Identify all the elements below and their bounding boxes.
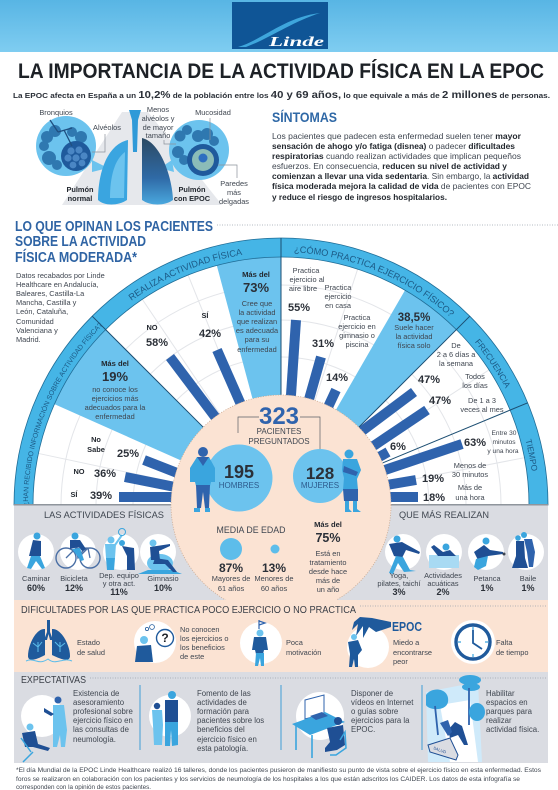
lung labels: Menos [147, 105, 169, 114]
text: asesoramiento: asesoramiento [73, 698, 125, 707]
mujeres [293, 449, 361, 512]
text: formación: Fomento de las [197, 689, 251, 698]
semicircular chart [14, 238, 548, 506]
media de edad [212, 525, 294, 593]
chart grid [38, 269, 524, 725]
chart labels: frecuencia: 47% [418, 374, 440, 386]
bars [119, 320, 462, 497]
data source note: Valenciana y [16, 326, 58, 335]
footnote: *El día Mundial de la EPOC Linde Healthcare realizó 16 talleres, donde los pacientes pusieron de manifiesto su punto de vista sobre el ejercicio físico en esta enfermedad. Estos [16, 767, 541, 774]
mujeres: MUJERES [301, 481, 339, 490]
icon: caminar: Caminar [22, 574, 50, 583]
text: falta de tiempo: de tiempo [496, 648, 528, 657]
trachea [129, 110, 141, 152]
icon: deporte en equipo: 11% [110, 587, 128, 597]
chart labels: cómo practica: aire libre [289, 284, 317, 293]
text: miedo: Miedo a [393, 638, 420, 647]
chart labels: información: 39% [90, 490, 112, 502]
icon: caminar [18, 532, 54, 593]
media de edad: Mayores de [212, 574, 250, 583]
icon: petanca: 1% [480, 583, 494, 593]
chart labels: información: 36% [94, 468, 116, 480]
text: parques: actividad física. [486, 725, 539, 734]
chart labels: realiza: Cree que [242, 299, 272, 308]
chart labels: realiza: es adecuada [236, 326, 279, 335]
chart labels: cómo practica: ejercicio en [338, 322, 376, 331]
lung labels [39, 105, 249, 206]
text: parques [486, 689, 539, 734]
chart labels: frecuencia: 2 a 6 días a [437, 350, 476, 359]
chart labels: información: 25% [117, 448, 139, 460]
chart labels: tiempo: 30 minutos [452, 470, 488, 479]
total: PACIENTES [257, 427, 301, 436]
lung labels: con EPOC [174, 194, 211, 203]
lung labels: Paredes [220, 179, 248, 188]
right lung [142, 138, 173, 204]
chart labels: realiza [146, 270, 279, 354]
icon: yoga: pilates, taichí [377, 579, 422, 588]
síntomas [272, 110, 531, 202]
icon: yoga [377, 534, 422, 597]
icon: question: ? [161, 631, 169, 645]
footnote: foros se realizaron en colaboración con los pacientes y los servicios de neumología de los hospitales a los que están adscritos los CAIDER. Los datos de esta infografía se [16, 776, 521, 783]
síntomas: comienzan a llevar una vida sedentaria. Sin embargo, la actividad [272, 171, 529, 181]
chart labels: tiempo: 19% [422, 473, 444, 485]
chart labels: información: adecuados para la [85, 403, 146, 412]
lung labels: más [227, 188, 241, 197]
chart labels: cómo practica: 38,5% [398, 312, 430, 324]
text: formación: esta patología. [197, 744, 248, 753]
section heading: opinion: LO QUE OPINAN LOS PACIENTES [15, 219, 213, 235]
más del 75%: más de [316, 576, 340, 585]
subtitle: La EPOC afecta en España a un 10,2% de la población entre los 40 y 69 años, lo que equivale a más de 2 millones de personas. [13, 89, 550, 101]
dividers [140, 685, 422, 750]
icon: bicicleta: 12% [65, 583, 83, 593]
chart labels: realiza: 42% [199, 328, 221, 340]
icon: deporte en equipo: Dep. equipo [99, 571, 139, 580]
chart labels: tiempo: minutos [492, 439, 516, 446]
icon: actividades acuáticas: 2% [436, 587, 450, 597]
text: poca motivación [286, 638, 321, 657]
chart labels: cómo practica: 14% [326, 372, 348, 384]
activities heading: LAS ACTIVIDADES FÍSICAS [44, 510, 164, 520]
lung labels: alvéolos y [142, 114, 175, 123]
text: no conocen: los beneficios [180, 643, 225, 652]
más del 75% [309, 520, 347, 594]
sector dividers [92, 238, 528, 463]
lung labels: delgadas [219, 197, 249, 206]
left lung [98, 140, 128, 204]
panel: expectativas [14, 672, 548, 763]
chart labels: realiza: 73% [243, 280, 269, 295]
chart labels: cómo practica: en casa [325, 301, 352, 310]
icon: gimnasio [138, 534, 182, 593]
text: formación: pacientes sobre los [197, 716, 264, 725]
chart labels: cómo practica: la actividad [396, 332, 432, 341]
text: no conocen: No conocen [180, 625, 219, 634]
chart labels: información [71, 359, 146, 502]
text: parques: Habilitar [486, 689, 515, 698]
mujeres: 128 [306, 464, 334, 483]
text: parques: parques para [486, 707, 533, 716]
chart labels: realiza: para su [245, 335, 269, 344]
chart labels: realiza: Más del [242, 270, 270, 279]
lung labels: Pulmón [66, 185, 94, 194]
data source note: Madrid. [16, 335, 41, 344]
text: miedo [393, 638, 432, 666]
chart labels: cómo practica: piscina [345, 340, 369, 349]
chart labels: frecuencia: la semana [439, 359, 474, 368]
síntomas: respiratorias cuando realizan actividades que implican pequeños [272, 151, 521, 161]
más del 75%: desde hace [309, 567, 347, 576]
text: poca motivación: motivación [286, 648, 321, 657]
icon: vídeos [292, 692, 346, 758]
media de edad: 61 años [218, 584, 244, 593]
chart labels: tiempo: Menos de [454, 461, 486, 470]
icon: miedo EPOC [347, 617, 422, 668]
data source note: Baleares, Castilla-La [16, 289, 85, 298]
chart labels: información: Sabe [87, 445, 105, 454]
activities heading [44, 510, 489, 520]
icon: parque: SALUD [433, 745, 447, 755]
icon: question [134, 621, 176, 663]
chart labels: tiempo: Más de [458, 483, 482, 492]
text: vídeos: ejercicios para la [351, 716, 410, 725]
chart labels: cómo practica: 55% [288, 302, 310, 314]
icon: yoga: Yoga, [390, 571, 408, 580]
media de edad: 87% [219, 561, 243, 575]
síntomas: física moderada mejora la calidad de vida de pacientes con EPOC [272, 181, 531, 191]
chart labels: información: ejercicios más [92, 394, 139, 403]
síntomas: y reduce el riesgo de ingresos hospitalarios. [272, 192, 447, 202]
hombres: HOMBRES [219, 481, 259, 490]
text: vídeos: o guías sobre [351, 707, 398, 716]
chart labels: tiempo: una hora [455, 493, 485, 502]
icon: parque [426, 675, 485, 762]
chart labels: tiempo [422, 430, 519, 504]
data source note: León, Cataluña, [16, 307, 68, 316]
lung labels: Pulmón [178, 185, 206, 194]
band label: cómo: ¿CÓMO PRACTICA EJERCICIO FÍSICO? [294, 246, 454, 316]
text: asesoramiento: Existencia de [73, 689, 119, 698]
más del 75%: Más del [314, 520, 342, 529]
chart labels: información: No [91, 435, 101, 444]
media de edad: Menores de [254, 574, 294, 583]
chart labels: cómo practica: Practica [293, 266, 320, 275]
logo: Linde [232, 2, 328, 50]
data source note: Datos recabados por Linde [16, 271, 105, 280]
text: miedo: encontrarse [393, 648, 432, 657]
icon: deporte en equipo [99, 528, 139, 597]
chart labels: realiza: enfermedad [237, 345, 277, 354]
logo: Linde: Linde [267, 35, 324, 50]
text: vídeos [351, 689, 414, 734]
hombres: 195 [224, 462, 254, 482]
lung: normal circle [36, 116, 108, 176]
text: formación: actividades de [197, 698, 247, 707]
band label: información: ¿HAN RECIBIDO INFORMACIÓN SOBRE ACTIVIDAD FÍSICA? [23, 322, 102, 504]
icon: bicicleta [56, 532, 100, 593]
text: falta de tiempo [496, 638, 528, 657]
chart labels: frecuencia: veces al mes [460, 405, 504, 414]
chart labels: frecuencia: De 1 a 3 [468, 396, 496, 405]
text: formación: formación para [197, 707, 250, 716]
media de edad: 13% [262, 561, 286, 575]
text: asesoramiento [73, 689, 133, 744]
media de edad: 60 años [261, 584, 287, 593]
chart labels: realiza: 58% [146, 337, 168, 349]
más del 75%: 75% [315, 531, 341, 545]
chart labels: cómo practica: Suele hacer [394, 323, 434, 332]
lung labels: normal [68, 194, 92, 203]
chart labels: información: Más del [101, 359, 129, 368]
chart labels: frecuencia: los días [462, 381, 488, 390]
icon: petanca: Petanca [473, 574, 501, 583]
total: 323 [259, 403, 299, 430]
icon: actividades acuáticas: Actividades [424, 571, 462, 580]
icon: gimnasio: Gimnasio [147, 574, 179, 583]
síntomas: SÍNTOMAS [272, 110, 337, 125]
icon: miedo EPOC: EPOC [392, 619, 422, 634]
más del 75%: Está en [315, 549, 341, 558]
text: formación: ejercicio físico en [197, 735, 257, 744]
icon: lungs [26, 620, 72, 662]
header band [0, 0, 558, 52]
chart labels: frecuencia: 6% [390, 441, 406, 453]
chart labels: información: enfermedad [95, 412, 135, 421]
icon: caminar: 60% [27, 583, 45, 593]
hombres [190, 444, 272, 512]
text: parques: espacios en [486, 698, 528, 707]
chart labels: realiza: NO [146, 323, 158, 332]
chart labels: información: 19% [102, 369, 128, 384]
síntomas: esfuerzos. En consecuencia, reducen su nivel de actividad y [272, 161, 507, 171]
data source note: Mancha, Castilla y [16, 298, 77, 307]
lung labels: Mucosidad [195, 108, 231, 117]
chart labels: frecuencia: De [451, 341, 461, 350]
lung: EPOC circle [160, 120, 229, 180]
icon: gimnasio: 10% [154, 583, 172, 593]
lung labels: de mayor [143, 123, 174, 132]
text: no conocen: de este [180, 652, 204, 661]
icon: petanca [468, 534, 506, 593]
wedge: 73% [217, 257, 281, 399]
lung labels: tamaño [146, 131, 170, 140]
icon: baile [508, 532, 544, 593]
síntomas: sensación de ahogo y/o fatiga (disnea) o padecer dificultades [272, 141, 515, 151]
icon: consulta [21, 695, 67, 762]
text: estado de salud: Estado [77, 638, 100, 647]
icon: poca motivación [240, 620, 282, 666]
text: asesoramiento: neumología. [73, 735, 116, 744]
text: parques: realizar [486, 716, 512, 725]
text: falta de tiempo: Falta [496, 638, 513, 647]
activities heading: QUE MÁS REALIZAN [399, 510, 489, 520]
chart labels: frecuencia: Todos [465, 372, 485, 381]
text: estado de salud: de salud [77, 648, 105, 657]
lung labels: Alvéolos [93, 123, 121, 132]
panel: dificultades [14, 600, 548, 672]
icon: actividades acuáticas [424, 534, 462, 597]
chart labels: cómo practica: ejercicio al [290, 275, 325, 284]
icon: baile: Baile [520, 574, 536, 583]
text: formación [197, 689, 264, 753]
text: miedo: peor [393, 657, 408, 666]
text: asesoramiento: ejercicio físico en [73, 716, 133, 725]
chart labels: información: no conoce los [92, 385, 138, 394]
chart labels: cómo practica: Practica [325, 283, 352, 292]
chart labels: tiempo: 18% [423, 492, 445, 504]
chart labels: cómo practica: gimnasio o [339, 331, 375, 340]
chart labels: información: NO [73, 467, 85, 476]
band label: realiza: REALIZA ACTIVIDAD FÍSICA [128, 249, 242, 300]
chart labels: frecuencia [390, 341, 504, 453]
lungs diagram [36, 105, 249, 206]
section heading: opinion: FÍSICA MODERADA* [15, 249, 137, 266]
panel: expectativas: EXPECTATIVAS [21, 674, 86, 686]
chart labels: cómo practica: física solo [398, 341, 430, 350]
chart labels: cómo practica: 31% [312, 338, 334, 350]
total [238, 403, 320, 450]
chart labels: frecuencia: 47% [429, 395, 451, 407]
section heading: opinion: SOBRE LA ACTIVIDAD [15, 234, 146, 250]
icon: bicicleta: Bicicleta [60, 574, 89, 583]
panel: actividades físicas [14, 505, 548, 601]
chart labels: tiempo: y una hora [487, 448, 519, 455]
icon: clock [451, 620, 495, 664]
text: formación: beneficios del [197, 725, 245, 734]
chart labels: cómo practica [288, 266, 434, 384]
total: PREGUNTADOS [248, 437, 310, 446]
data source note [16, 271, 105, 344]
outer band [14, 238, 548, 505]
chart labels: realiza: que realizan [237, 317, 277, 326]
chart labels: tiempo: Entre 30 [492, 430, 517, 437]
text: no conocen [180, 625, 228, 661]
icon: deporte en equipo: y otra act. [103, 579, 135, 588]
data source note: Comunidad [16, 317, 54, 326]
más del 75%: tratamiento [310, 558, 346, 567]
chart labels: cómo practica: Practica [344, 313, 371, 322]
síntomas: Los pacientes que padecen esta enfermedad suelen tener mayor [272, 131, 522, 141]
text: estado de salud [77, 638, 105, 657]
chart labels: tiempo: 63% [464, 437, 486, 449]
icon: actividades acuáticas: acuáticas [427, 579, 459, 588]
text: asesoramiento: profesional sobre [73, 707, 133, 716]
media de edad: MEDIA DE EDAD [217, 525, 285, 535]
panel: dificultades: DIFICULTADES POR LAS QUE PRACTICA POCO EJERCICIO O NO PRACTICA [21, 604, 356, 616]
section heading: opinion [15, 219, 558, 266]
band label: tiempo: TIEMPO [526, 438, 538, 471]
icon: yoga: 3% [392, 587, 406, 597]
lung labels: Bronquios [39, 108, 73, 117]
text: no conocen: los ejercicios o [180, 634, 228, 643]
text: poca motivación: Poca [286, 638, 304, 647]
chart labels: realiza: la actividad [239, 308, 275, 317]
text: vídeos: Disponer de [351, 689, 393, 698]
band label: frecuencia: FRECUENCIA [475, 338, 510, 388]
footnote [16, 767, 541, 790]
center circle: pacientes [171, 395, 391, 615]
text: vídeos: EPOC. [351, 725, 375, 734]
chart labels: cómo practica: ejercicio [324, 292, 352, 301]
chart labels: realiza: SÍ [202, 311, 209, 320]
data source note: Healthcare en Andalucía, [16, 280, 99, 289]
wedge: 38,5% [336, 290, 456, 427]
más del 75%: un año [317, 585, 339, 594]
text: vídeos: vídeos en Internet [351, 698, 414, 707]
icon: formación [149, 691, 191, 746]
wedge: 19% [54, 330, 203, 460]
chart labels: información: SÍ [71, 490, 78, 499]
text: asesoramiento: las consultas de [73, 725, 129, 734]
icon: baile: 1% [521, 583, 535, 593]
